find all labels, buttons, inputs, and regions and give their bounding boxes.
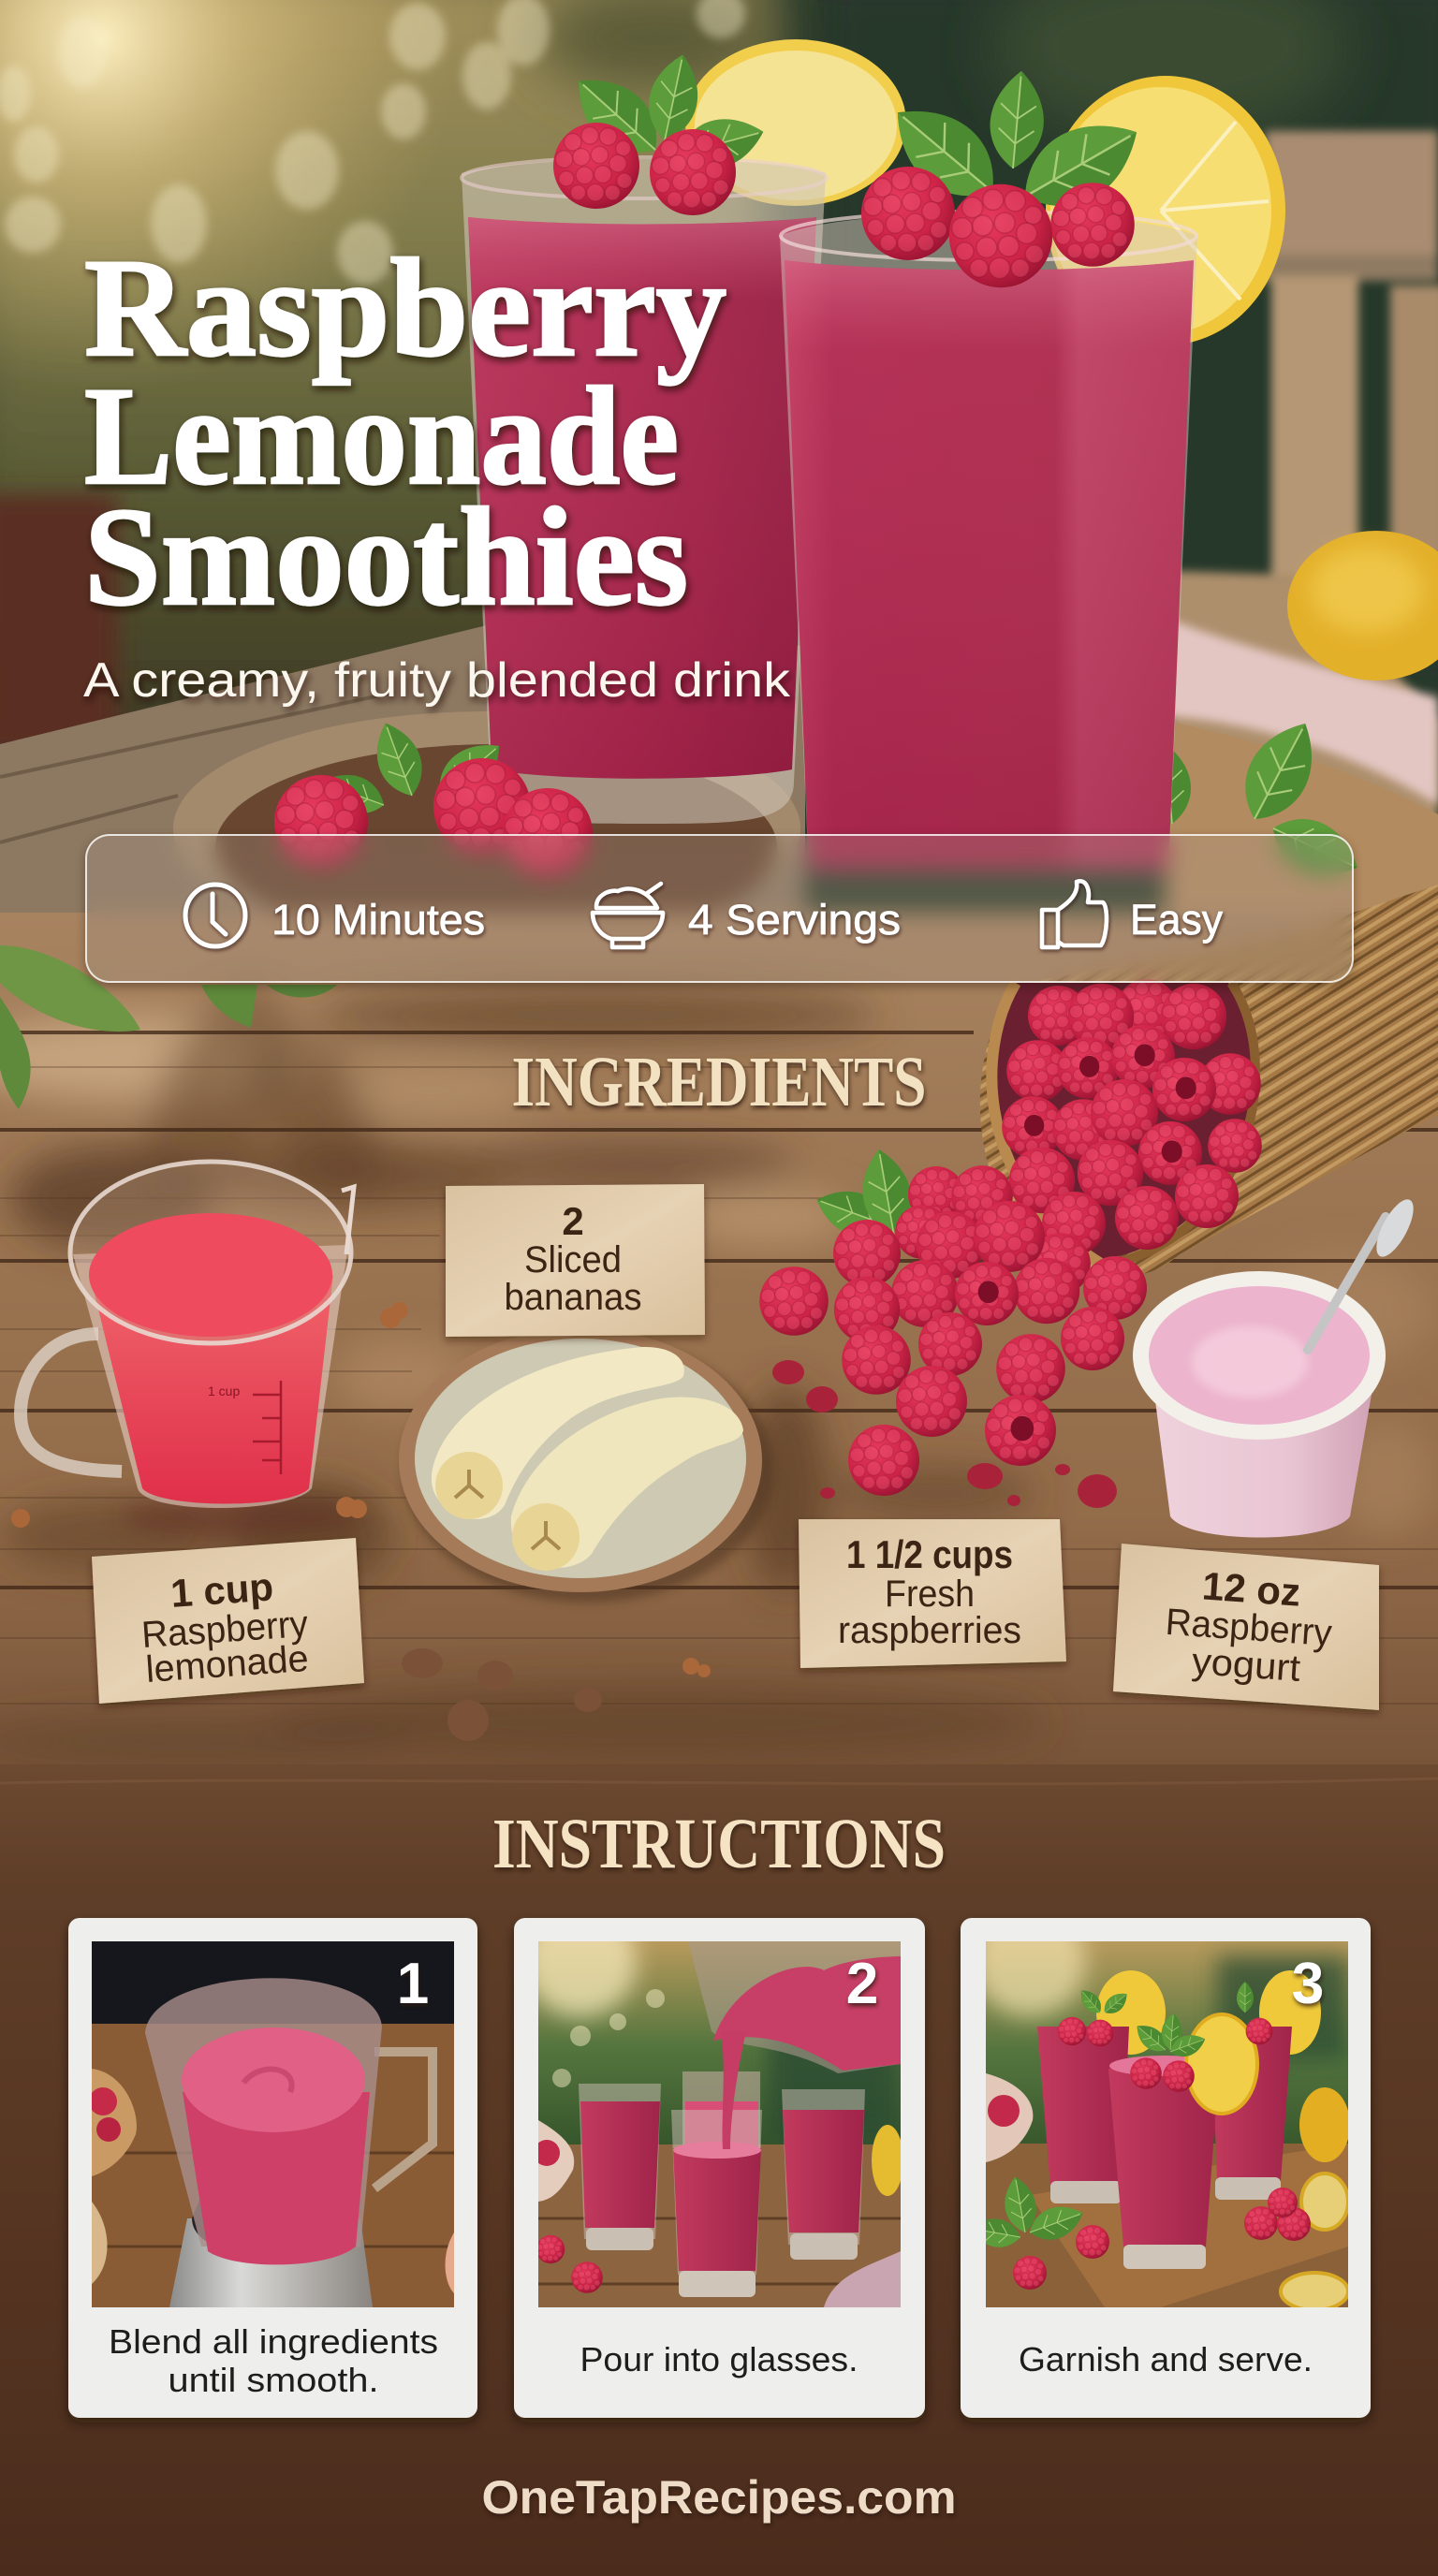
right mint (1143, 710, 1368, 890)
label: bananas: Sliced (524, 1239, 622, 1281)
step 2 caption: Pour into glasses. (580, 2340, 858, 2378)
label: raspberries: Fresh (885, 1573, 975, 1615)
tray raspberries and mint (274, 716, 593, 878)
step 1 number: 1 (397, 1952, 429, 2016)
rear table surface (1170, 571, 1438, 917)
bananas (432, 1347, 684, 1519)
blender jar (145, 1978, 382, 2247)
chair (1259, 131, 1438, 585)
label: bananas: bananas (504, 1277, 642, 1318)
label: yogurt: Raspberry (1164, 1602, 1333, 1654)
title: Smoothies (84, 479, 688, 635)
label: yogurt: 12 oz (1201, 1564, 1302, 1615)
terracotta planter (0, 494, 118, 756)
raspberry pile (759, 1145, 1147, 1508)
back raspberries and mint (560, 60, 674, 170)
step 3 number: 3 (1292, 1952, 1324, 2016)
step card 3 (961, 1905, 1371, 2418)
right board (1166, 721, 1438, 917)
blender base (169, 2218, 373, 2307)
back glass (462, 50, 827, 824)
footer website: OneTapRecipes.com (481, 2471, 957, 2524)
wooden tray (173, 711, 800, 945)
front glass (780, 68, 1197, 871)
berries in basket (1002, 979, 1262, 1255)
crumbs and water drops (11, 1302, 711, 1741)
hero photo background (0, 0, 1438, 950)
front lemon (1046, 76, 1285, 345)
step 1 caption: until smooth. (169, 2361, 378, 2399)
stat: difficulty: Easy (1130, 896, 1223, 944)
icon: thumbs up (1042, 881, 1107, 947)
label: raspberries: 1 1/2 cups (846, 1532, 1013, 1576)
pink towel (1166, 618, 1438, 805)
subtitle: A creamy, fruity blended drink (83, 653, 791, 708)
heading: ingredients: INGREDIENTS (511, 1043, 927, 1121)
step 3 caption: Garnish and serve. (1019, 2340, 1313, 2378)
label: raspberries: raspberries (838, 1610, 1021, 1651)
step card 2 (514, 1905, 925, 2418)
step 3 photo (986, 1941, 1348, 2307)
back lemons (1096, 1970, 1166, 2055)
blender handle (374, 2052, 433, 2188)
stat: servings: 4 Servings (688, 896, 901, 944)
garnish (1131, 2018, 1172, 2057)
step 2 photo (538, 1941, 901, 2307)
back lemon (685, 39, 906, 206)
instructions section (0, 1764, 1438, 2576)
icon: bowl (593, 884, 663, 947)
lemon (872, 2125, 903, 2196)
label: lemonade: Raspberry (140, 1603, 309, 1656)
label: lemonade (92, 1538, 364, 1704)
stat: time: 10 Minutes (271, 896, 485, 944)
pitcher and stream (688, 1941, 901, 2073)
leaves top left (0, 945, 337, 1109)
yogurt cup (1133, 1194, 1420, 1537)
wood table section (0, 885, 1438, 1774)
heading: instructions: INSTRUCTIONS (492, 1805, 946, 1883)
step 2 number: 2 (846, 1952, 878, 2016)
stats glass panel (85, 834, 1354, 983)
label: bananas (446, 1184, 705, 1337)
step 1 caption (109, 2322, 438, 2399)
bowls (92, 2069, 137, 2176)
cutting board (1030, 2144, 1348, 2307)
glasses (1037, 2027, 1129, 2187)
title: Raspberry (84, 230, 726, 386)
step 1 photo (92, 1941, 454, 2307)
plank seams (0, 1032, 1438, 1588)
measuring jug: 1 cup (208, 1383, 240, 1398)
berries and towel (536, 2235, 565, 2263)
icon: clock (185, 885, 245, 946)
bokeh lights (0, 0, 745, 285)
title (84, 230, 726, 635)
front raspberries and mint (876, 87, 1014, 218)
label: yogurt (1113, 1544, 1379, 1710)
juice drops (772, 1360, 1117, 1508)
label: lemonade: 1 cup (169, 1564, 274, 1616)
spoon (1308, 1217, 1386, 1350)
light and shadow patches (0, 970, 1432, 1769)
label: bananas: 2 (562, 1199, 584, 1243)
step card 1 (68, 1918, 477, 2418)
step 1 caption: Blend all ingredients (109, 2322, 438, 2361)
left table surface (0, 625, 805, 917)
measuring jug (21, 1162, 365, 1537)
bowl (538, 2120, 574, 2202)
bowl, lemons (986, 2073, 1033, 2162)
label: raspberries (799, 1519, 1066, 1668)
title: Lemonade (84, 359, 679, 514)
glasses (579, 2071, 865, 2297)
front lemon (1186, 2014, 1257, 2114)
banana plate (399, 1328, 773, 1603)
label: lemonade: lemonade (144, 1638, 310, 1690)
right lemon (1287, 531, 1438, 681)
basket (980, 885, 1438, 1276)
label: yogurt: yogurt (1191, 1641, 1301, 1690)
